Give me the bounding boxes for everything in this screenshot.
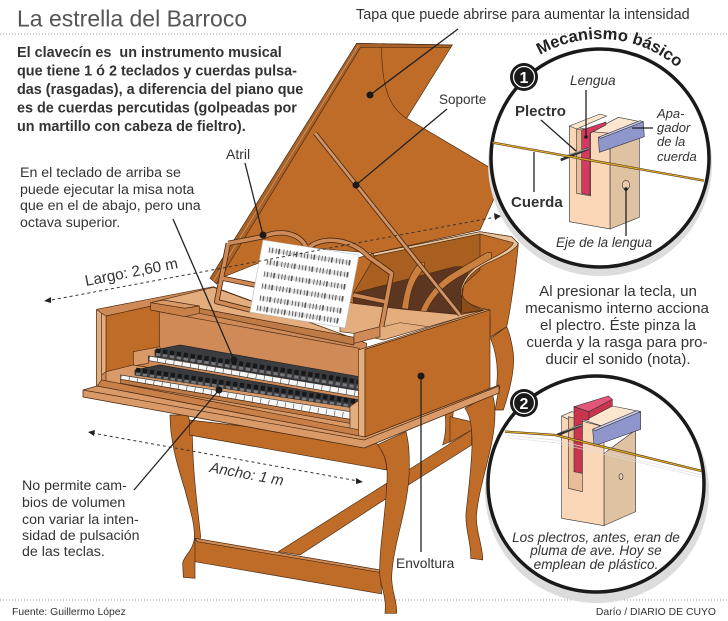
upper keyboard — [149, 345, 359, 397]
label: teclado de arriba: En el teclado de arriba se — [20, 165, 181, 181]
case interior — [340, 232, 518, 340]
jack block 2 — [505, 396, 702, 526]
base shelf — [83, 385, 499, 448]
label: soporte: Soporte — [439, 92, 486, 107]
label: eje de la lengua: Eje de la lengua — [556, 235, 652, 250]
explanation text: mecanismo interno acciona — [525, 300, 709, 317]
label: tapa — [356, 7, 690, 98]
case front panel — [358, 309, 490, 440]
label: lengua: Lengua — [570, 73, 616, 88]
label: lengua — [570, 73, 616, 139]
number badge 2: 2 — [520, 396, 529, 413]
label: teclado de arriba — [20, 165, 238, 364]
label: cuerda — [511, 152, 563, 211]
label: eje de la lengua — [556, 187, 652, 250]
label: envoltura: Envoltura — [396, 556, 455, 571]
lid — [210, 43, 495, 284]
rear right leg top — [491, 327, 514, 410]
label: apagador: Apa- — [656, 106, 685, 121]
number badge 1 — [510, 63, 538, 91]
explanation text: el plectro. Éste pinza la — [540, 317, 697, 334]
label: teclado de arriba: octava superior. — [20, 215, 120, 231]
number badge 2 — [510, 389, 538, 417]
sheet music — [250, 240, 359, 328]
label: volumen: bios de volumen — [22, 495, 125, 511]
credit: Darío / DIARIO DE CUYO — [596, 607, 716, 618]
intro text — [17, 45, 303, 135]
keyboard case — [97, 300, 380, 438]
explanation text: Al presionar la tecla, un — [539, 283, 697, 300]
explanation text: cuerda y la rasga para pro- — [526, 334, 708, 351]
caption: pluma de ave. Hoy se — [529, 543, 662, 558]
dimension: largo — [44, 213, 501, 303]
intro text: es de cuerdas percutidas (golpeadas por — [17, 100, 297, 116]
caption: Los plectros, antes, eran de — [512, 530, 680, 545]
intro text: El clavecín es un instrumento musical — [17, 45, 282, 61]
number badge 1: 1 — [520, 70, 529, 87]
heading: mecanismo basico: Mecanismo básico — [536, 27, 681, 66]
label: plectro — [515, 103, 576, 151]
source: Fuente: Guillermo López — [12, 607, 126, 618]
label: cuerda: Cuerda — [511, 194, 563, 211]
label: volumen: No permite cam- — [22, 478, 127, 494]
intro text: das (rasgadas), a diferencia del piano que — [17, 82, 303, 98]
label: teclado de arriba: puede ejecutar la misa nota — [20, 182, 194, 198]
dimension: ancho: Ancho: 1 m — [207, 460, 285, 490]
label: atril: Atril — [226, 146, 250, 162]
explanation text — [525, 283, 709, 368]
label: volumen: de las teclas. — [22, 544, 105, 560]
intro text: que tiene 1 ó 2 teclados y cuerdas pulsa- — [17, 64, 297, 80]
support rod — [315, 133, 460, 315]
title: La estrella del Barroco — [17, 6, 247, 32]
intro text: un martillo con cabeza de fieltro). — [17, 119, 246, 135]
label: volumen — [22, 386, 222, 560]
jack block 1 — [493, 114, 704, 229]
label: envoltura — [396, 372, 455, 571]
label: volumen: con variar la inten- — [22, 512, 139, 528]
label: apagador — [632, 106, 697, 164]
label: volumen: sidad de pulsación — [22, 528, 140, 544]
label: soporte — [352, 92, 486, 188]
lower keyboard — [121, 365, 359, 419]
label: apagador: cuerda — [657, 149, 697, 164]
label: plectro: Plectro — [515, 103, 566, 120]
dimension: ancho — [88, 430, 363, 490]
label: teclado de arriba: que en el de abajo, pero una — [20, 198, 201, 214]
label: atril — [226, 146, 266, 238]
caption: emplean de plástico. — [534, 557, 658, 572]
dimension: largo: Largo: 2,60 m — [84, 255, 179, 290]
rear legs and stretchers — [170, 393, 495, 613]
label: apagador: de la — [657, 134, 685, 149]
caption — [512, 530, 680, 572]
label: apagador: gador — [657, 120, 691, 135]
panel: mechanism 1 — [488, 27, 712, 276]
label: tapa: Tapa que puede abrirse para aumentar la intensidad — [356, 7, 690, 23]
case top — [97, 287, 367, 437]
harpsichord illustration — [83, 43, 518, 613]
panel: mechanism 2 — [485, 376, 709, 603]
music desk — [217, 233, 392, 327]
explanation text: ducir el sonido (nota). — [545, 351, 691, 368]
